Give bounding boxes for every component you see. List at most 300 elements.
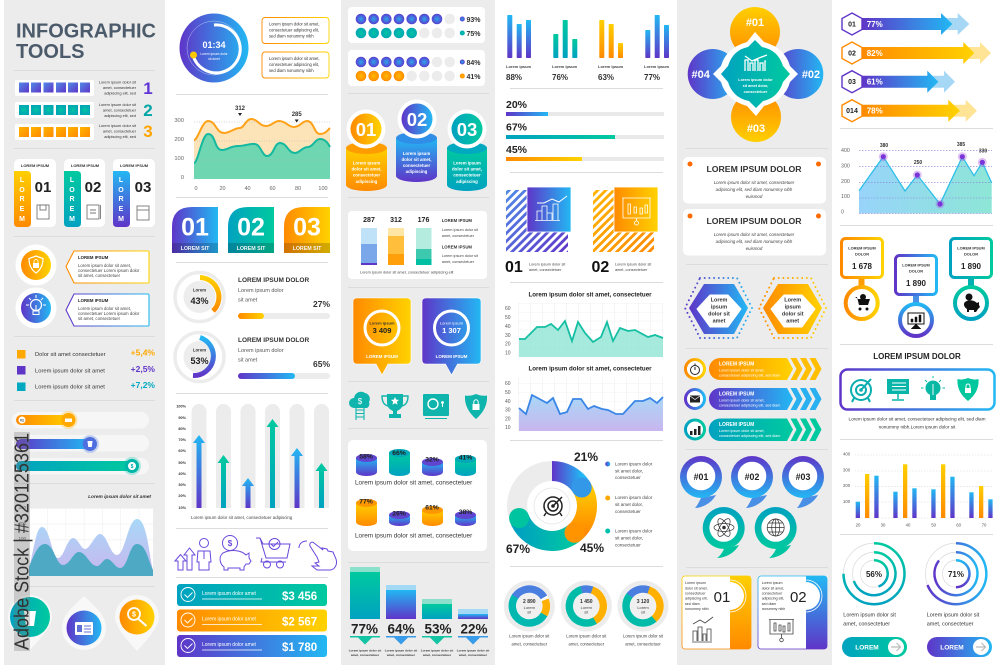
icon: pointing hand xyxy=(299,541,337,570)
peak area chart: 330 xyxy=(979,148,987,154)
panel: square progress rows xyxy=(15,79,153,141)
peak area chart: 200 xyxy=(841,179,850,185)
area chart: column 1 xyxy=(18,494,153,576)
panel: mini cylinders row 1: 41% xyxy=(459,454,472,462)
small donut 3 120 xyxy=(618,580,668,646)
line chart: teal: 30 xyxy=(505,333,511,339)
tag: cart 1 678: LOREM IPSUM xyxy=(848,246,876,250)
line chart: teal: 10 xyxy=(505,350,511,356)
bar chart: grouped blue and orange: 100 xyxy=(843,499,851,504)
bar chart: 77 64 53 22 percent: Lorem ipsum dolor sit xyxy=(385,648,417,652)
heading card 2: Lorem ipsum dolor sit amet, consectetuer xyxy=(714,232,795,237)
hexagon badge purple: Lorem xyxy=(711,298,728,304)
panel: mini cylinders row 2 xyxy=(355,498,476,540)
cylinder 01: Lorem ipsum xyxy=(353,160,380,166)
line chart: blue: 60 xyxy=(505,381,511,387)
panel: shield callout: sit amet, consectetuer xyxy=(78,273,121,278)
card 02 with board icon: adipiscing elit, xyxy=(762,597,784,601)
peak area chart: 400 xyxy=(841,148,850,154)
callout boxes: timer notes: consectetuer adipiscing elit, xyxy=(269,62,319,67)
arrow bar chart: 70% xyxy=(178,438,187,442)
panel: mini cylinders row 1: 58% xyxy=(359,454,373,460)
arrow row 014: 014 xyxy=(846,108,858,115)
panel: square progress rows: Lorem ipsum dolor sit xyxy=(99,80,137,84)
panel: lorem cards 01 02 03: L xyxy=(70,177,75,184)
area chart: orange and teal: 80 xyxy=(295,186,301,192)
icon: shopping cart xyxy=(256,538,290,568)
arrow row 03: 61% xyxy=(867,78,883,87)
panel: lorem cards 01 02 03: E xyxy=(70,206,75,213)
area chart: orange and teal: 60 xyxy=(269,186,276,192)
arrow bar chart: 10% xyxy=(178,506,187,510)
panel: lorem cards 01 02 03: L xyxy=(119,177,124,184)
pill row: stopwatch: Lorem ipsum dolor sit amet, xyxy=(719,368,764,372)
panel: square progress rows: amet, consectetuer xyxy=(103,108,137,112)
text block: strip caption: nonummy nibh.Lorem ipsum dolor sit xyxy=(879,424,956,430)
button: purple lorem xyxy=(927,637,992,657)
panel: stacked bars 287 312 176: Lorem ipsum dolor sit xyxy=(442,254,479,258)
panel: lorem cards 01 02 03: R xyxy=(69,196,75,203)
small donut 2 890: sit xyxy=(527,610,532,614)
panel: mini cylinders row 2: Lorem ipsum dolor sit amet, consectetuer xyxy=(355,532,473,540)
panel: mini cylinders row 2: 77% xyxy=(359,498,373,506)
donut 53% with progress: 53% xyxy=(190,356,209,366)
heading card 2: LOREM IPSUM DOLOR xyxy=(706,216,802,226)
speech bubble globe icon xyxy=(755,507,797,558)
icon: ID card marker xyxy=(62,596,106,650)
button: teal lorem xyxy=(842,637,907,657)
card 01 with chart icon: Lorem ipsum xyxy=(685,581,706,585)
icon: piggy bank with coin: $ xyxy=(228,539,233,548)
panel: shield callout: Lorem ipsum dolor sit amet, xyxy=(78,263,131,268)
panel: lorem cards 01 02 03 xyxy=(14,159,155,227)
panel: stacked bars 287 312 176: amet, consectetuer xyxy=(442,260,475,264)
line chart: blue: 10 xyxy=(505,425,511,431)
icon: cloud with ladder: $ xyxy=(358,397,363,406)
card 01 with chart icon: 01 xyxy=(714,589,730,606)
progress bars 20 67 45: 20% xyxy=(506,99,528,111)
peak area chart: 100 xyxy=(841,194,850,200)
hexagon badge orange: Lorem xyxy=(784,298,801,304)
pill row: chart: consectetuer adipiscing elit, sed diam xyxy=(719,434,780,438)
small donut 2 890: 2 890 xyxy=(523,599,536,605)
peak area chart xyxy=(841,142,992,216)
tag: cart 1 678 xyxy=(842,238,882,319)
cylinder 03: consectetuer xyxy=(453,172,481,178)
arrow row 014 xyxy=(842,100,977,122)
arrow bar chart: 90% xyxy=(178,416,187,420)
arrow row 014: 78% xyxy=(867,107,883,116)
bar chart: 77 64 53 22 percent: 53% xyxy=(424,622,452,636)
line chart: blue: 30 xyxy=(505,408,511,414)
hexagon badge purple xyxy=(685,278,752,338)
panel: lorem cards 01 02 03: LOREM IPSUM xyxy=(21,163,50,168)
bar chart: grouped blue and orange: 70 xyxy=(982,522,987,528)
panel: lorem cards 01 02 03: 02 xyxy=(85,179,101,196)
heading card 1: LOREM IPSUM DOLOR xyxy=(706,164,802,174)
arrow row 02 xyxy=(842,42,991,64)
arrow row 02: 02 xyxy=(848,50,856,58)
donut chart: 21 45 67 percent: consectetuer xyxy=(615,542,641,548)
arrow bar chart: 40% xyxy=(178,472,187,476)
timer circle: Lorem ipsum dolor xyxy=(200,52,229,56)
arrow row 03 xyxy=(842,71,955,93)
tag: piggy 1 890: DOLOR xyxy=(964,252,978,256)
arrow row 01: 01 xyxy=(848,22,856,28)
value bars: dollar amounts: Lorem ipsum dolor amet xyxy=(202,642,257,648)
hexagon badge purple: dolor sit xyxy=(708,312,730,318)
panel: lorem cards 01 02 03: R xyxy=(19,196,25,203)
icon: trophy xyxy=(382,394,408,418)
radial chart 71%: Lorem ipsum dolor sit xyxy=(927,612,980,618)
number tabs 01 02 03: 02 xyxy=(237,214,265,242)
four-petal diagram: #04 xyxy=(692,69,711,81)
pill row: envelope: Lorem ipsum dolor sit amet, xyxy=(719,398,764,402)
panel: light bulb callout: Lorem ipsum dolor sit amet, xyxy=(78,306,131,311)
bar chart: grouped blue and orange: 200 xyxy=(843,483,851,488)
bar chart: grouped blue and orange: 50 xyxy=(931,522,937,528)
pin card: 1 307: Lorem ipsum xyxy=(440,320,464,326)
cylinder 02: 02 xyxy=(407,109,427,130)
text block: strip caption xyxy=(848,416,986,430)
bar chart: grouped blue and orange: 40 xyxy=(906,522,911,528)
radial chart 56%: amet, consectetuer xyxy=(843,622,890,628)
peak area chart: 300 xyxy=(841,164,850,170)
line chart: blue: 20 xyxy=(505,416,511,422)
small donut 2 890 xyxy=(504,580,555,646)
hexagon badge purple: ipsum xyxy=(711,304,727,310)
panel: square progress rows: amet, consectetuer xyxy=(103,128,137,134)
panel: dot progress rows: 75% xyxy=(466,31,481,38)
area chart: orange and teal: 300 xyxy=(174,118,184,124)
donut chart: 21 45 67 percent: sit amet dolor, xyxy=(615,468,643,474)
four-petal diagram xyxy=(688,7,823,142)
callout boxes: timer notes: sed diam nonummy nibh xyxy=(269,34,314,38)
cylinder 03 xyxy=(447,110,487,191)
card 01 with chart icon xyxy=(682,576,751,649)
tag: board 1 890 xyxy=(896,256,936,336)
radial chart 71%: 71% xyxy=(948,570,964,579)
arrow bar chart: 50% xyxy=(178,461,187,465)
panel: square progress rows: adipiscing elit, sed xyxy=(104,134,136,139)
donut chart: 21 45 67 percent: sit amet dolor, xyxy=(615,536,643,540)
panel: dot progress rows xyxy=(348,7,485,86)
area chart: orange and teal xyxy=(174,106,330,192)
small donut 2 890: Lorem xyxy=(524,605,536,610)
panel: square progress rows: Lorem ipsum dolor sit xyxy=(99,102,137,107)
cylinder 03: 03 xyxy=(457,119,477,140)
panel: mini cylinders row 1 xyxy=(348,440,487,551)
arrow row 03: 03 xyxy=(848,79,856,86)
four-petal diagram: #01 xyxy=(746,17,764,29)
striped tile 02: Lorem ipsum dolor sit xyxy=(615,262,652,266)
line chart: blue xyxy=(505,366,663,431)
watermark: stock id: Adobe Stock | #320125361 xyxy=(12,433,34,650)
area chart: orange and teal: 100 xyxy=(318,186,328,192)
pill row: chart xyxy=(686,418,822,441)
heading card 1: euismod xyxy=(746,194,763,199)
arrow bar chart: Lorem ipsum dolor sit amet, consectetuer adipiscing xyxy=(191,515,293,520)
text block: strip caption: Lorem ipsum dolor sit amet, consectetuer adipiscing elit, sed diam xyxy=(848,416,986,422)
icon: growth arrows and person xyxy=(175,538,211,570)
progress bars 20 67 45 xyxy=(506,99,664,161)
heading card 2: euismod xyxy=(746,246,763,251)
bar chart: 77 64 53 22 percent: amet, consectetuer xyxy=(351,653,380,657)
panel: lorem cards 01 02 03: O xyxy=(69,187,75,194)
callout boxes: timer notes: consectetuer adipiscing elit, xyxy=(269,28,319,32)
hexagon badge orange: amet xyxy=(786,318,799,324)
panel: mini cylinders row 2: 38% xyxy=(459,509,472,516)
panel: lorem cards 01 02 03: R xyxy=(118,196,124,203)
panel: slider progress bars xyxy=(12,411,149,475)
grouped bars: four mini charts: Lorem ipsum xyxy=(552,64,578,69)
panel: shield callout: consectetuer Lorem ipsum dolor xyxy=(78,268,140,273)
number tabs 01 02 03: 01 xyxy=(181,214,209,242)
hexagon badge orange: dolor sit xyxy=(782,312,804,318)
donut 43% with progress: Lorem ipsum dolor xyxy=(238,288,284,294)
area chart: orange and teal: 0 xyxy=(181,175,184,181)
donut chart: 21 45 67 percent: 21% xyxy=(574,450,598,464)
donut 53% with progress: Lorem xyxy=(193,348,206,352)
pill row: chart: Lorem ipsum dolor sit amet, xyxy=(719,429,764,433)
title: INFOGRAPHIC xyxy=(16,20,156,42)
panel: dot progress rows: 84% xyxy=(466,60,481,67)
panel: lorem cards 01 02 03: 01 xyxy=(35,179,51,196)
cylinder 03: dolor sit amet, xyxy=(452,166,482,172)
arrow bar chart: 60% xyxy=(178,449,187,453)
striped tile 02 xyxy=(592,187,658,276)
pill row: stopwatch: consectetuer adipiscing elit, sed diam xyxy=(719,374,780,378)
line chart: teal: 60 xyxy=(505,306,511,312)
icon: shield with lock xyxy=(465,394,487,419)
value bars: dollar amounts: Lorem ipsum dolor amet xyxy=(202,616,257,622)
bar chart: grouped blue and orange: 30 xyxy=(881,522,886,528)
panel: percent legend: +2,5% xyxy=(131,364,155,374)
speech bubble #01 xyxy=(680,456,722,508)
panel: mini cylinders row 2: 61% xyxy=(425,504,439,512)
cylinder 02: adipiscing xyxy=(406,169,428,174)
icon: teal pin marker xyxy=(8,595,52,650)
area chart: orange and teal: 312 xyxy=(235,106,246,112)
panel: mini cylinders row 2: 26% xyxy=(392,510,406,518)
area chart: orange and teal: 20 xyxy=(219,186,226,192)
icon: piggy bank with coin xyxy=(220,536,251,570)
value bars: dollar amounts xyxy=(177,584,327,657)
title xyxy=(16,20,156,63)
bar chart: 77 64 53 22 percent: amet, consectetuer xyxy=(423,653,452,657)
value bars: dollar amounts: $3 456 xyxy=(282,591,317,603)
striped tile 01 xyxy=(505,187,571,276)
donut chart: 21 45 67 percent: 67% xyxy=(506,542,530,556)
panel: percent legend: Lorem ipsum dolor sit amet xyxy=(35,384,105,390)
pill row: envelope xyxy=(686,388,822,410)
cylinder 02: Lorem ipsum xyxy=(403,151,430,156)
button: teal lorem: LOREM xyxy=(855,644,879,652)
pin card: 1 307: 1 307 xyxy=(442,326,461,335)
bar chart: 77 64 53 22 percent: Lorem ipsum dolor sit xyxy=(349,648,381,652)
line chart: blue: Lorem ipsum dolor sit amet, consectetuer xyxy=(528,366,652,372)
donut chart: 21 45 67 percent xyxy=(506,450,653,556)
pin card: 1 307: LOREM IPSUM xyxy=(436,354,468,359)
area chart: column 1: 300 xyxy=(18,505,26,510)
panel: square progress rows: 1 xyxy=(143,79,153,98)
grouped bars: four mini charts: 76% xyxy=(552,73,568,82)
area chart: column 1: 100 xyxy=(18,536,26,541)
pin card: 3 409 xyxy=(353,298,411,375)
striped tile 02: amet, consectetuer xyxy=(615,268,648,272)
cylinder 02: dolor sit amet, xyxy=(401,157,432,162)
small donut 1 450: Lorem ipsum dolor sit xyxy=(566,634,607,638)
pill row: envelope: consectetuer adipiscing elit, sed diam xyxy=(719,404,780,408)
arrow row 01: 77% xyxy=(867,20,883,29)
donut chart: 21 45 67 percent: consectetuer xyxy=(615,475,641,480)
donut 53% with progress: LOREM IPSUM DOLOR xyxy=(238,337,309,344)
four-petal diagram: sit amet dolor, xyxy=(743,84,768,88)
panel: percent legend: +5,4% xyxy=(131,348,155,358)
arrow bar chart: 100% xyxy=(176,404,187,408)
donut 43% with progress: Lorem xyxy=(193,288,206,292)
callout boxes: timer notes: Lorem ipsum dolor sit amet, xyxy=(269,56,320,61)
panel: square progress rows: amet, consectetuer xyxy=(103,85,137,90)
card 02 with board icon: dolor sit amet, xyxy=(762,586,784,590)
panel: stacked bars 287 312 176: Lorem ipsum dolor sit amet, consectetuer adipiscing elit xyxy=(360,270,454,274)
grouped bars: four mini charts: Lorem ipsum xyxy=(644,64,670,69)
speech bubble #01: #01 xyxy=(694,472,708,482)
value bars: dollar amounts: $2 567 xyxy=(282,616,317,628)
icon: magnifier dollar marker: $ xyxy=(132,612,136,618)
title: TOOLS xyxy=(16,41,85,63)
pin card: 3 409: Lorem ipsum xyxy=(369,320,395,326)
heading card 1: adipiscing elit, sed diam nonummy nibh xyxy=(716,187,793,192)
panel: lorem cards 01 02 03: E xyxy=(119,206,124,213)
icon strip xyxy=(840,370,994,410)
panel: slider progress bars: $ xyxy=(131,464,134,470)
bar chart: 77 64 53 22 percent: 77% xyxy=(351,622,378,636)
donut 43% with progress: 43% xyxy=(190,296,209,306)
number tabs 01 02 03: LOREM SIT xyxy=(237,246,266,252)
cylinder 01: consectetuer xyxy=(353,172,380,178)
small donut 3 120: 3 120 xyxy=(637,599,649,605)
radial chart 56%: 56% xyxy=(866,570,882,579)
peak area chart: 250 xyxy=(914,160,922,166)
donut 43% with progress: 27% xyxy=(313,299,330,309)
donut chart: 21 45 67 percent: 45% xyxy=(580,541,604,555)
panel: lorem cards 01 02 03: LOREM IPSUM xyxy=(71,163,100,168)
arrow bar chart: 20% xyxy=(178,494,187,498)
area chart: orange and teal: 200 xyxy=(174,137,184,143)
four-petal diagram: #02 xyxy=(802,69,820,81)
striped tile 01: amet, consectetuer xyxy=(529,268,562,272)
donut 53% with progress: sit amet xyxy=(238,358,258,364)
tag: board 1 890: LOREM IPSUM xyxy=(902,262,930,268)
bar chart: 77 64 53 22 percent: amet, consectetuer xyxy=(387,653,416,657)
heading card 2: adipiscing elit, sed diam nonummy nibh xyxy=(716,239,793,244)
area chart: orange and teal: 285 xyxy=(292,112,302,118)
card 02 with board icon: Lorem ipsum xyxy=(762,581,782,585)
pill row: chart: LOREM IPSUM xyxy=(719,422,754,428)
line chart: blue: 40 xyxy=(505,399,511,405)
bar chart: grouped blue and orange: 20 xyxy=(856,522,861,528)
cylinder 01 xyxy=(346,110,387,191)
number tabs 01 02 03: LOREM SIT xyxy=(293,246,322,252)
peak area chart: 385 xyxy=(957,142,965,148)
donut chart: 21 45 67 percent: Lorem ipsum dolor xyxy=(615,495,653,500)
panel: stacked bars 287 312 176: Lorem ipsum dolor sit xyxy=(442,228,479,232)
area chart: orange and teal: 100 xyxy=(174,156,184,162)
line chart: teal: Lorem ipsum dolor sit amet, consectetuer xyxy=(528,292,652,298)
small donut 1 450: Lorem xyxy=(581,605,593,610)
panel: square progress rows: 3 xyxy=(143,122,153,141)
grouped bars: four mini charts: 88% xyxy=(506,73,522,82)
four-petal diagram: Lorem ipsum dolor xyxy=(738,78,773,82)
line chart: teal: 20 xyxy=(505,342,511,348)
panel: stacked bars 287 312 176: 287 xyxy=(363,217,375,224)
hexagon badge purple: amet xyxy=(713,318,726,324)
bar chart: grouped blue and orange: 60 xyxy=(956,522,962,528)
striped tile 02: 02 xyxy=(592,259,609,276)
striped tile 01: 01 xyxy=(505,259,523,276)
card 01 with chart icon: nonummy nibh xyxy=(685,607,709,611)
tag: piggy 1 890: LOREM IPSUM xyxy=(957,246,985,250)
striped tile 01: Lorem ipsum dolor sit xyxy=(529,262,566,266)
panel: lorem cards 01 02 03: M xyxy=(19,216,25,223)
card 02 with board icon: 02 xyxy=(790,589,807,606)
panel: light bulb callout: LOREM IPSUM xyxy=(78,298,109,303)
value bars: dollar amounts: $1 780 xyxy=(282,642,317,654)
panel: square progress rows: adipiscing elit, sed xyxy=(104,113,136,118)
pill row: stopwatch: LOREM IPSUM xyxy=(719,362,754,368)
panel: stacked bars 287 312 176: LOREM IPSUM xyxy=(442,218,472,223)
panel: lorem cards 01 02 03: LOREM IPSUM xyxy=(120,163,149,168)
panel: lorem cards 01 02 03: 03 xyxy=(135,179,151,196)
panel: square progress rows: 2 xyxy=(143,101,153,120)
donut chart: 21 45 67 percent: Lorem ipsum dolor xyxy=(615,462,653,466)
button: purple lorem: LOREM xyxy=(940,644,964,652)
four-petal diagram: consectetuer xyxy=(744,90,768,94)
panel: lorem cards 01 02 03: E xyxy=(20,206,25,213)
small donut 3 120: amet, consectetuer xyxy=(625,642,661,646)
bar chart: grouped blue and orange: 300 xyxy=(843,468,851,472)
speech bubble #02 xyxy=(731,456,773,508)
peak area chart: 380 xyxy=(880,143,888,149)
grouped bars: four mini charts: 77% xyxy=(644,73,660,82)
icon: safe xyxy=(423,394,449,419)
bar chart: 77 64 53 22 percent xyxy=(349,567,489,657)
tag: piggy 1 890 xyxy=(950,238,992,319)
callout boxes: timer notes xyxy=(262,18,329,78)
card 01 with chart icon: consectetuer xyxy=(685,592,706,596)
line chart: teal xyxy=(505,292,663,357)
four-petal diagram: #03 xyxy=(747,123,765,135)
cylinder 03: adipiscing xyxy=(456,179,478,184)
card 02 with board icon: sed diam xyxy=(762,602,776,606)
panel: slider progress bars: #1 xyxy=(20,418,24,422)
small donut 3 120: Lorem ipsum dolor sit xyxy=(623,634,664,638)
panel: shield callout: LOREM IPSUM xyxy=(78,255,109,260)
panel: lorem cards 01 02 03: O xyxy=(19,187,25,194)
cylinder 01: dolor sit amet, xyxy=(351,166,382,172)
donut 53% with progress xyxy=(175,332,330,382)
grouped bars: four mini charts: 63% xyxy=(598,73,614,82)
card 02 with board icon: nonummy nibh xyxy=(762,607,785,611)
panel: lorem cards 01 02 03: M xyxy=(69,216,75,223)
arrow bar chart: 30% xyxy=(178,483,187,487)
panel: stacked bars 287 312 176: 312 xyxy=(390,217,402,224)
radial chart 56% xyxy=(843,543,904,628)
area chart: column 1: Lorem ipsum dolor sit amet xyxy=(88,494,151,500)
panel: mini cylinders row 1: 66% xyxy=(392,450,406,457)
heading card 2 xyxy=(683,209,826,256)
